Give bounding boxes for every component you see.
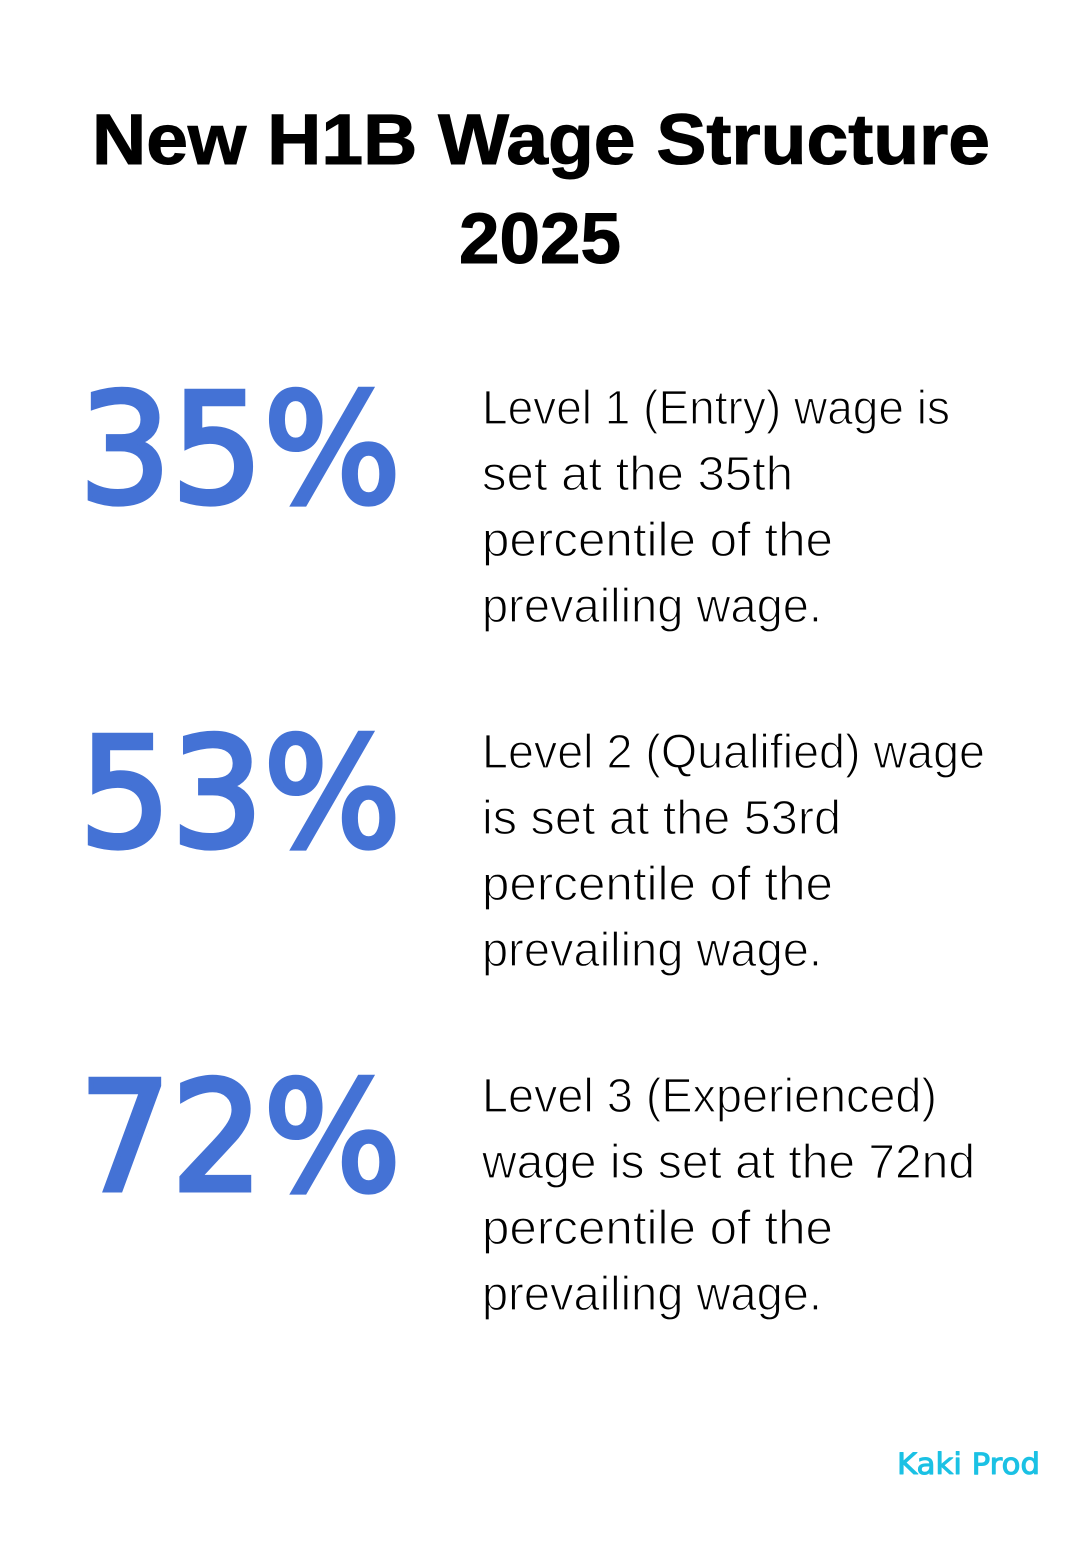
title	[92, 101, 990, 279]
text block: level 3 description: percentile of the	[482, 1202, 833, 1255]
panel: level 1	[79, 361, 950, 633]
logo: Kaki Prod: Kaki Prod	[897, 1447, 1040, 1481]
text block: level 1 description: set at the 35th	[482, 448, 793, 501]
title: New H1B Wage Structure	[92, 101, 990, 180]
panel: level 3	[79, 1049, 975, 1321]
text block: level 2 description: percentile of the	[482, 858, 833, 911]
text block: level 2 description: Level 2 (Qualified) wage	[482, 726, 985, 779]
text block: level 1 description: percentile of the	[482, 514, 833, 567]
statistic: 35%: 35%	[79, 361, 401, 538]
text block: level 1 description: Level 1 (Entry) wage is	[482, 382, 950, 435]
statistic: 72%: 72%	[79, 1049, 401, 1226]
text block: level 3 description: Level 3 (Experienced)	[482, 1070, 937, 1123]
text block: level 1 description: prevailing wage.	[482, 580, 822, 633]
text block: level 3 description	[481, 1070, 975, 1321]
text block: level 2 description: prevailing wage.	[482, 924, 822, 977]
text block: level 1 description	[482, 382, 950, 633]
text block: level 2 description: is set at the 53rd	[482, 792, 841, 845]
text block: level 3 description: wage is set at the 72nd	[481, 1136, 975, 1189]
title: 2025	[459, 200, 621, 279]
statistic: 53%: 53%	[79, 705, 401, 882]
text block: level 2 description	[482, 726, 985, 977]
panel: level 2	[79, 705, 985, 977]
text block: level 3 description: prevailing wage.	[482, 1268, 822, 1321]
